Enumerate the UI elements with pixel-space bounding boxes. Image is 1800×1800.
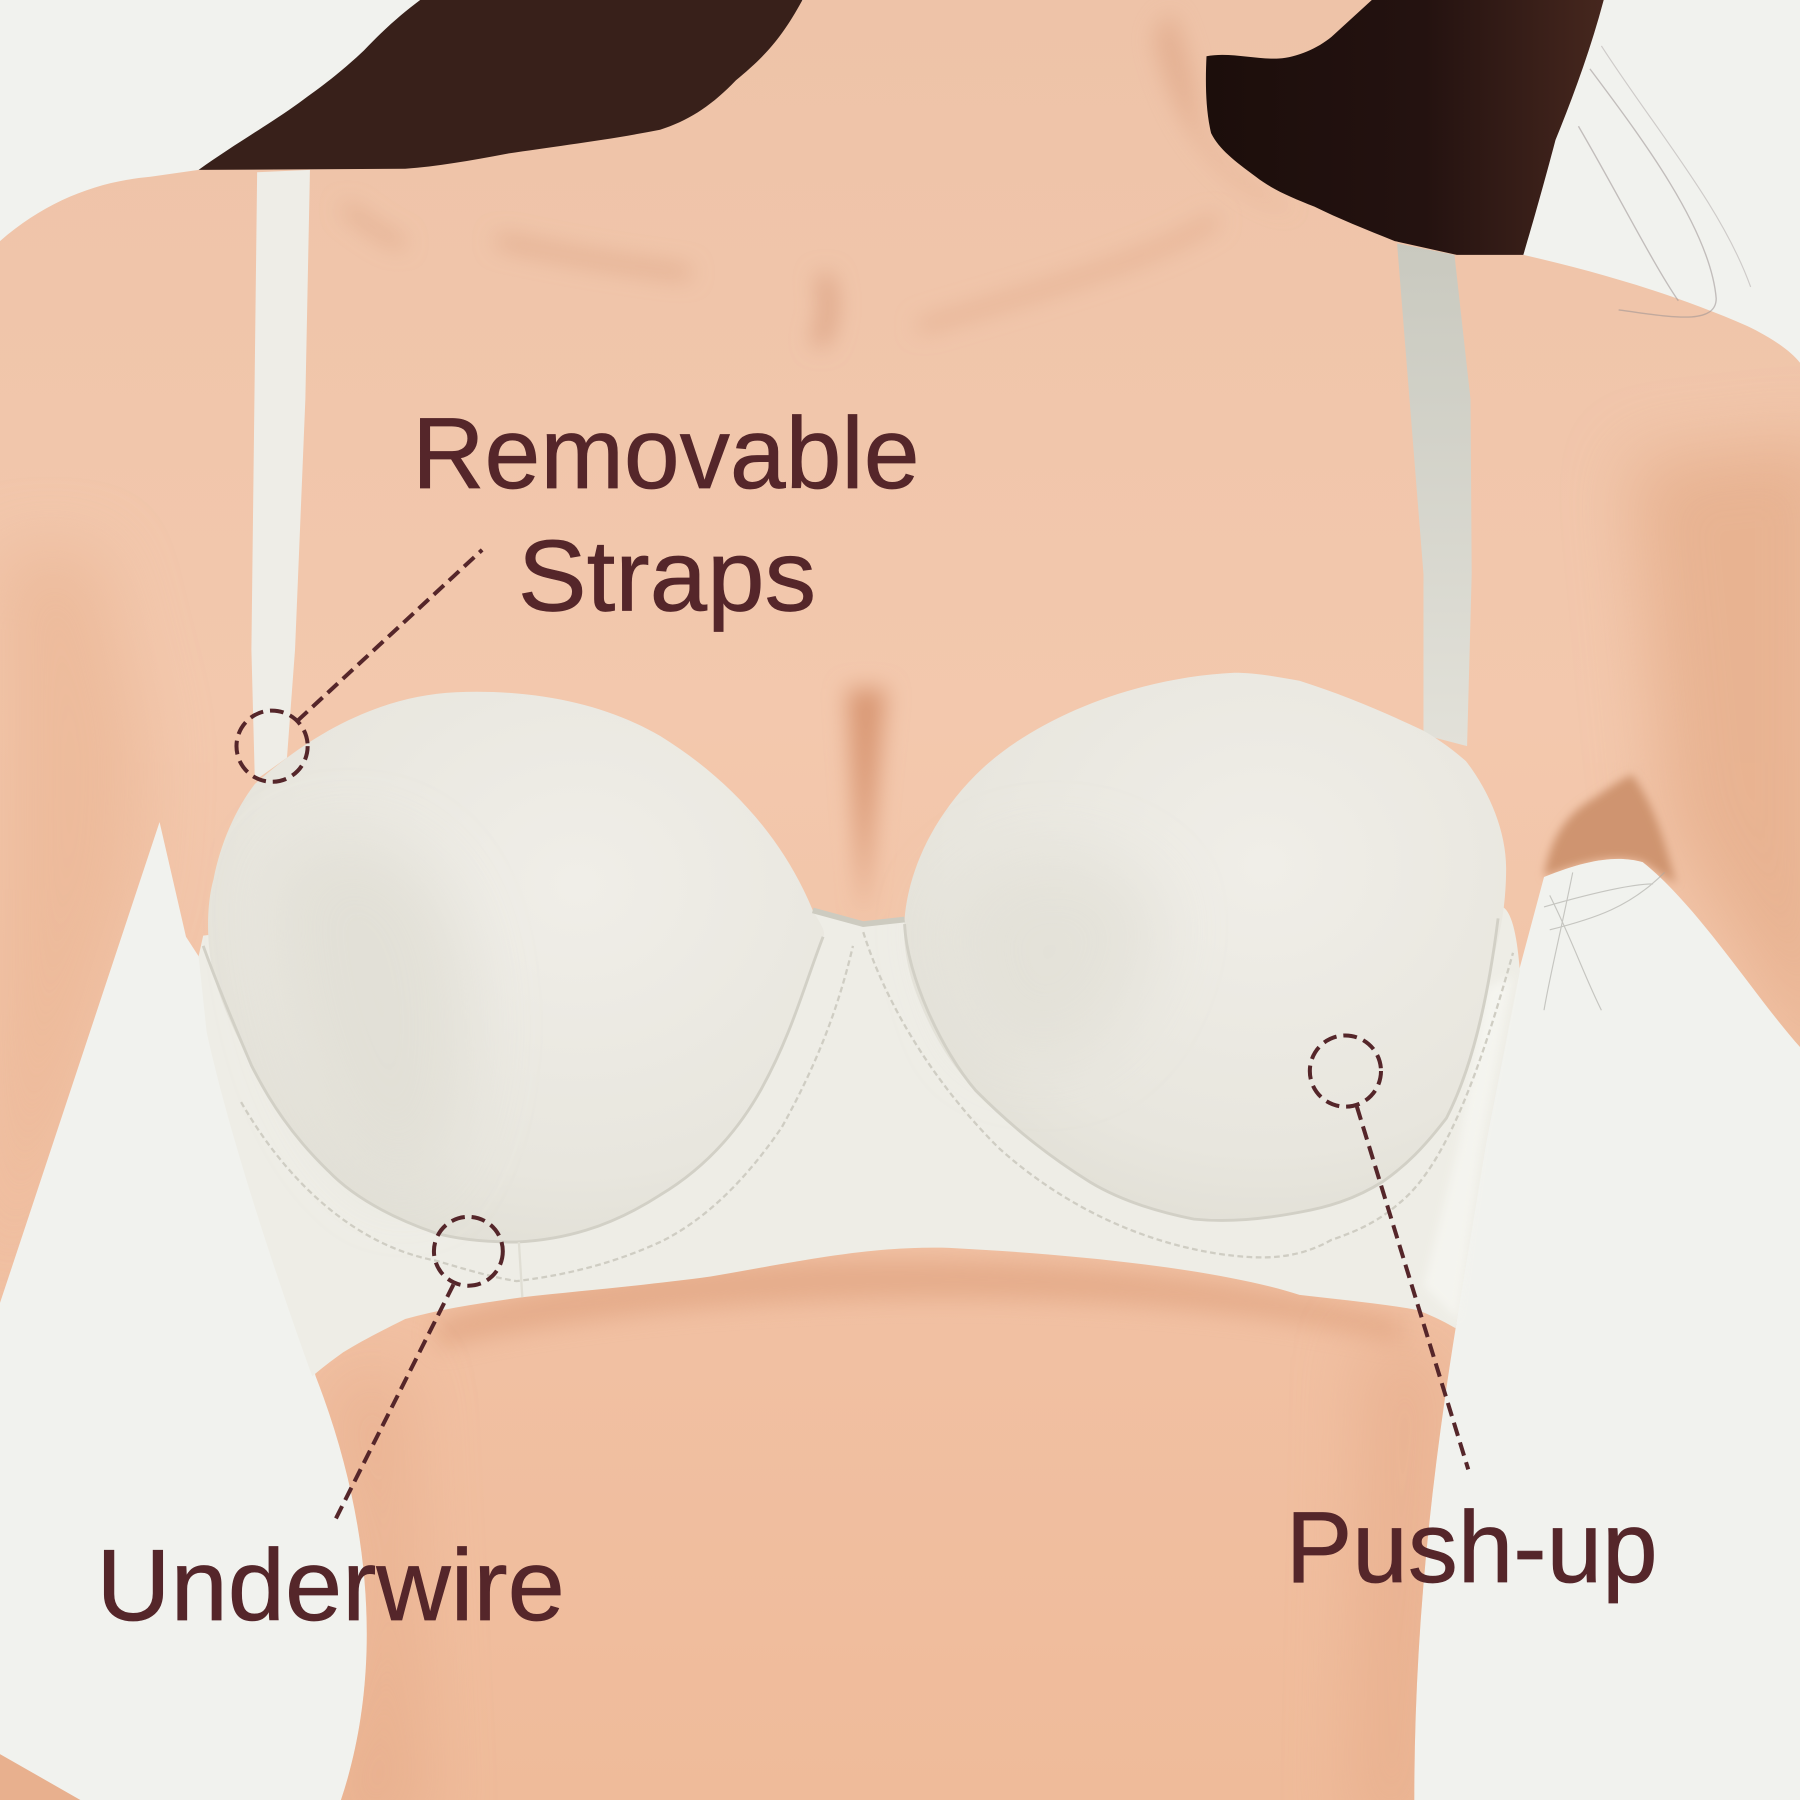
bra xyxy=(199,170,1520,1376)
hand at lower left xyxy=(0,1754,80,1800)
left cup xyxy=(208,692,824,1242)
callout: removable straps: Straps xyxy=(518,521,816,633)
left strap xyxy=(251,170,310,781)
label: underwire: Underwire xyxy=(96,1530,565,1642)
callout: underwire xyxy=(96,1217,565,1642)
band xyxy=(199,907,1520,1376)
underwire seams xyxy=(203,937,823,1242)
hair xyxy=(199,0,1751,1010)
right cup xyxy=(904,673,1506,1220)
label: push-up: Push-up xyxy=(1286,1492,1658,1604)
callout: push-up xyxy=(1286,1035,1658,1604)
callout: removable straps xyxy=(236,398,920,782)
right strap xyxy=(1397,243,1472,746)
fabric mottling xyxy=(276,839,468,1194)
band highlight xyxy=(1423,976,1513,1320)
label: removable straps: Removable xyxy=(412,398,920,510)
